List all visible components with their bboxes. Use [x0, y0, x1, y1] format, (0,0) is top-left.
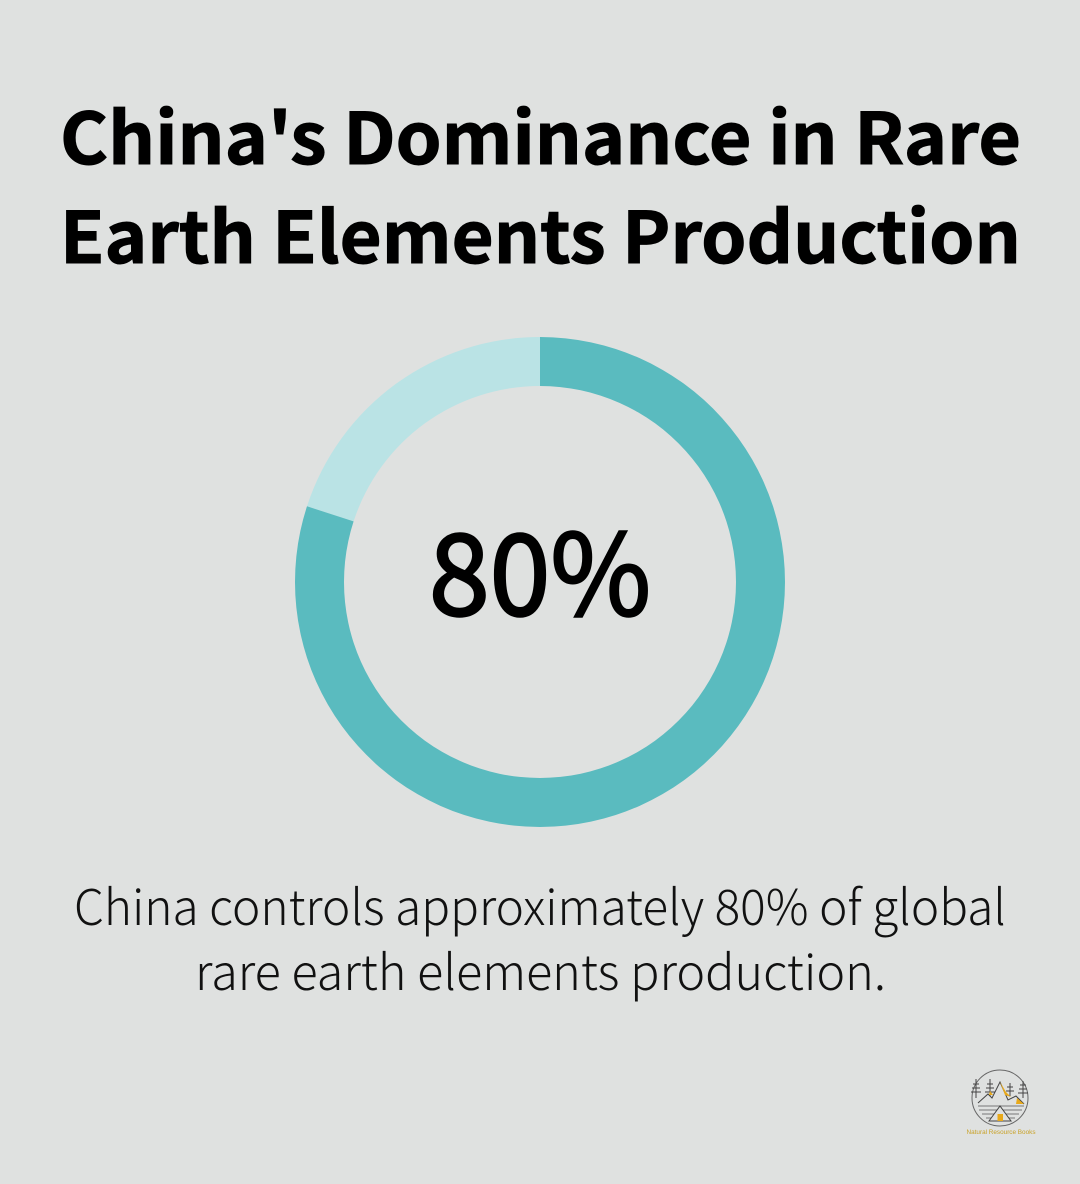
- logo trees: [971, 1079, 1028, 1098]
- title: Earth Elements Production: [60, 182, 1021, 284]
- logo circle: [972, 1070, 1028, 1126]
- logo cabin: [989, 1106, 1011, 1121]
- ring value 80%: [295, 337, 785, 827]
- logo caption: Natural Resource Books: [966, 1129, 1036, 1136]
- logo mountains: [978, 1082, 1024, 1104]
- ring remainder 20%: [307, 337, 540, 521]
- title: China's Dominance in Rare: [60, 83, 1021, 185]
- description text: China controls approximately 80% of global: [74, 869, 1006, 940]
- donut chart: 80%: [295, 337, 785, 827]
- title: [60, 83, 1021, 284]
- description text: rare earth elements production.: [195, 934, 886, 1005]
- logo water lines: [978, 1106, 1024, 1118]
- logo: Natural Resource Books: [966, 1070, 1036, 1136]
- percentage value: 80%: [429, 486, 651, 648]
- description text: [74, 869, 1006, 1005]
